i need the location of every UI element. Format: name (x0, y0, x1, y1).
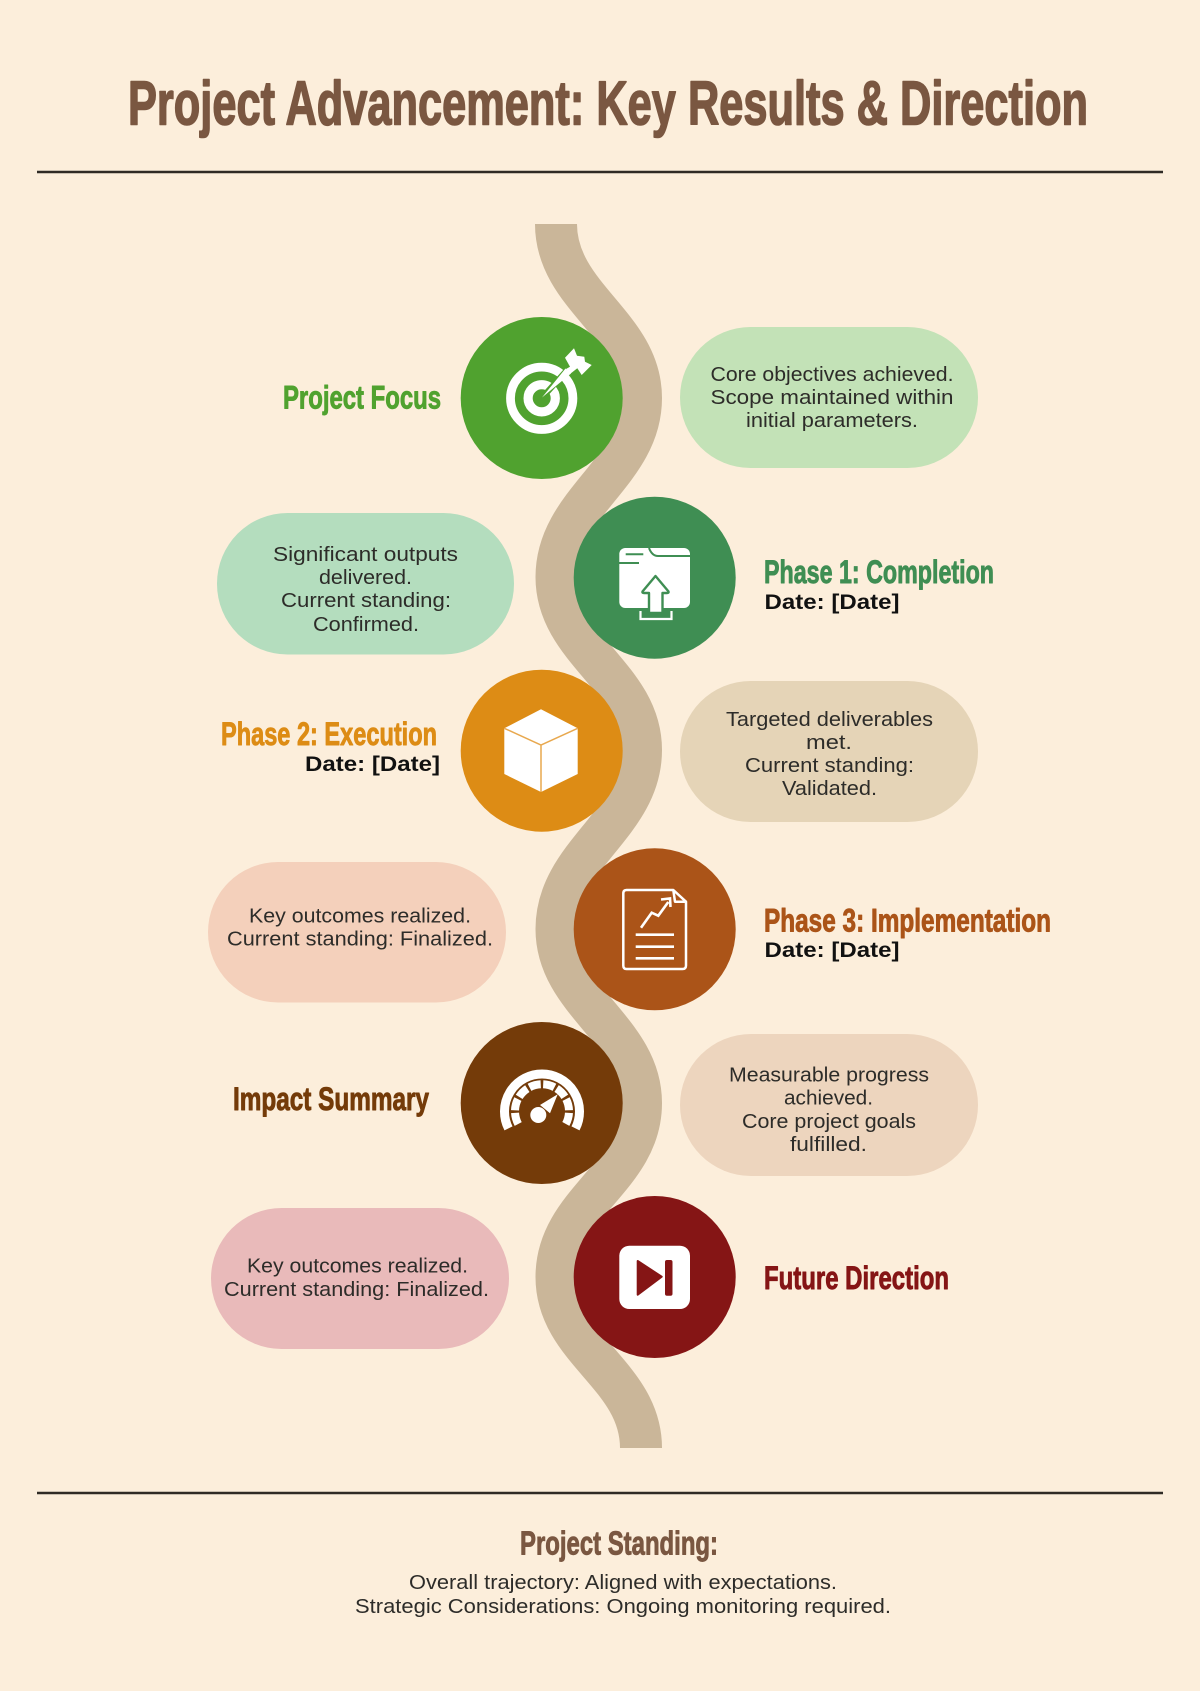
callout: Project Focus (680, 327, 978, 468)
step: Phase 1 (217, 497, 994, 659)
icon: target with arrow (510, 348, 592, 429)
orange circle badge (461, 670, 623, 832)
dark red circle badge (574, 1196, 736, 1358)
date: Phase 3: Date: [Date] (764, 939, 900, 962)
callout: Project Focus: Scope maintained within (710, 386, 954, 409)
heading: Project Focus: Project Focus (283, 380, 441, 416)
footer text (355, 1571, 891, 1618)
callout: Phase 1: Significant outputs (273, 543, 458, 566)
callout: Project Focus: Core objectives achieved. (710, 363, 954, 386)
footer: project standing (355, 1524, 891, 1618)
heading: Phase 2 Execution: Phase 2: Execution (221, 716, 437, 752)
callout: Phase 1 (217, 513, 514, 654)
callout: Phase 1: delivered. (319, 566, 412, 589)
callout: Phase 3: Current standing: Finalized. (227, 928, 493, 950)
callout: Phase 1: Current standing: (281, 589, 451, 612)
callout: Phase 2: Targeted deliverables (726, 708, 933, 731)
callout: Impact Summary (680, 1034, 978, 1176)
footer heading: Project Standing: (520, 1524, 718, 1562)
callout: Impact Summary: fulfilled. (790, 1133, 867, 1156)
callout: Phase 2: Validated. (782, 777, 877, 800)
callout: Future Direction (211, 1208, 509, 1349)
winding timeline path (556, 224, 641, 1448)
heading: Phase 3 Implementation: Phase 3: Implementation (764, 902, 1051, 938)
icon: cube (504, 709, 578, 792)
callout: Impact Summary: Measurable progress (729, 1064, 929, 1086)
callout: Phase 3: Key outcomes realized. (249, 904, 471, 928)
icon: report document with chart (623, 890, 686, 969)
brown circle badge (461, 1022, 623, 1184)
date: Phase 1: Date: [Date] (764, 591, 900, 614)
icon: speedometer gauge (504, 1074, 580, 1128)
footer text: Strategic Considerations: Ongoing monitoring required. (355, 1595, 891, 1618)
callout: Impact Summary: achieved. (784, 1086, 873, 1110)
step: Project Focus (283, 317, 978, 479)
step: Phase 3 (208, 848, 1051, 1010)
heading: Impact Summary: Impact Summary (233, 1081, 429, 1117)
rust circle badge (574, 848, 736, 1010)
icon: folder upload (619, 548, 690, 619)
callout: Phase 2: Current standing: (745, 754, 914, 777)
step: Future Direction (211, 1196, 949, 1358)
callout: Phase 3 (208, 862, 506, 1002)
heading: Future Direction: Future Direction (764, 1260, 949, 1296)
callout: Future Direction: Key outcomes realized. (247, 1254, 468, 1278)
icon: skip forward button (619, 1246, 690, 1309)
callout: Phase 2: met. (806, 731, 852, 754)
callout: Phase 2 (680, 681, 978, 822)
callout: Future Direction: Current standing: Finalized. (224, 1278, 489, 1301)
callout: Project Focus: initial parameters. (746, 409, 918, 432)
step: Phase 2 (221, 670, 978, 832)
green circle badge (461, 317, 623, 479)
date: Phase 2: Date: [Date] (305, 753, 440, 776)
step: Impact Summary (233, 1022, 978, 1184)
footer text: Overall trajectory: Aligned with expectations. (409, 1571, 837, 1594)
heading: Phase 1 Completion: Phase 1: Completion (764, 554, 994, 590)
dark green circle badge (574, 497, 736, 659)
callout: Impact Summary: Core project goals (742, 1110, 916, 1133)
callout: Phase 1: Confirmed. (313, 613, 419, 636)
